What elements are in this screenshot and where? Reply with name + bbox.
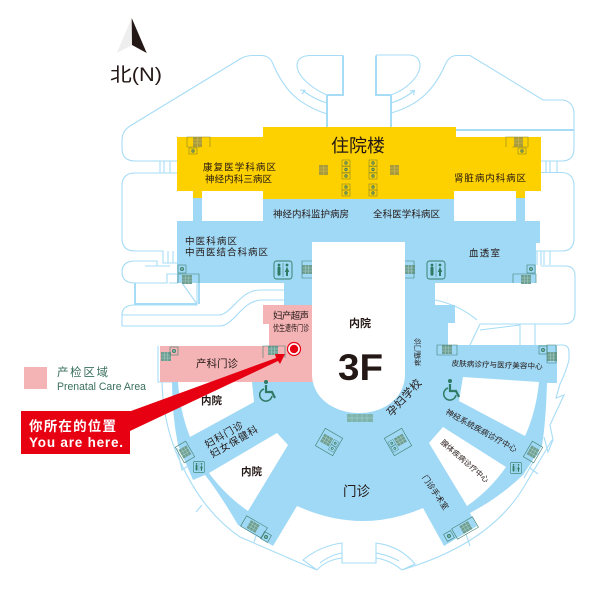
building outlines bbox=[122, 55, 575, 570]
map labels: 门诊手术室 bbox=[420, 473, 451, 512]
map labels: 内院 bbox=[349, 316, 371, 330]
map labels: 中西医结合科病区 bbox=[185, 246, 268, 258]
map labels: 神经内科三病区 bbox=[205, 174, 272, 186]
map labels: 3F bbox=[338, 347, 383, 388]
map labels: 妇科门诊 bbox=[202, 418, 246, 451]
icon: wheelchair right bbox=[444, 379, 459, 400]
icon: toilets bbox=[193, 261, 522, 474]
map labels: 门诊 bbox=[343, 484, 370, 499]
map labels: 妇女保健科 bbox=[208, 422, 261, 461]
you are here callout with arrow: 你所在的位置 bbox=[29, 418, 116, 434]
map labels: 内院 bbox=[241, 465, 262, 478]
you are here marker bbox=[288, 342, 300, 356]
legend: prenatal care area: Prenatal Care Area bbox=[57, 381, 147, 393]
map labels: 血透室 bbox=[469, 248, 500, 260]
map labels: 疼痛门诊 bbox=[413, 338, 422, 366]
ramp grid bbox=[347, 414, 373, 422]
map labels: 皮肤病诊疗与医疗美容中心 bbox=[451, 358, 543, 371]
floor plan bbox=[122, 55, 575, 570]
icon: wheelchair left bbox=[260, 380, 275, 401]
map labels: 住院楼 bbox=[331, 136, 385, 156]
map labels: 优生遗传门诊 bbox=[273, 323, 309, 333]
you are here callout with arrow bbox=[21, 354, 285, 454]
yellow inpatient building bbox=[177, 127, 541, 199]
stairs and lifts: clinics bbox=[161, 345, 557, 542]
blue clinic and ward areas bbox=[172, 198, 557, 546]
map labels: 腺体疾病诊疗中心 bbox=[439, 437, 491, 485]
map labels: 妇产超声 bbox=[273, 310, 309, 322]
you are here callout with arrow: You are here. bbox=[29, 435, 123, 450]
map labels: 神经系统疾病诊疗中心 bbox=[444, 407, 519, 454]
map labels bbox=[185, 136, 543, 512]
north arrow: 北(N) bbox=[110, 64, 162, 86]
map labels: 康复医学科病区 bbox=[203, 162, 276, 174]
map labels: 孕妇学校 bbox=[383, 376, 425, 419]
inner courtyards bbox=[178, 377, 539, 511]
map labels: 全科医学科病区 bbox=[373, 208, 440, 220]
pink prenatal care area bbox=[160, 305, 314, 382]
legend: prenatal care area bbox=[24, 365, 147, 393]
map labels: 中医科病区 bbox=[185, 236, 237, 248]
stairs and lifts: wards bbox=[178, 261, 536, 284]
map labels: 内院 bbox=[201, 394, 222, 407]
map labels: 肾脏病内科病区 bbox=[454, 172, 526, 184]
north arrow bbox=[110, 18, 162, 86]
legend: prenatal care area: 产检区域 bbox=[57, 365, 108, 379]
map labels: 神经内科监护病房 bbox=[273, 208, 349, 220]
stairs and lifts: inpatient building bbox=[187, 137, 528, 196]
central void bbox=[312, 242, 405, 413]
map labels: 产科门诊 bbox=[196, 357, 238, 370]
